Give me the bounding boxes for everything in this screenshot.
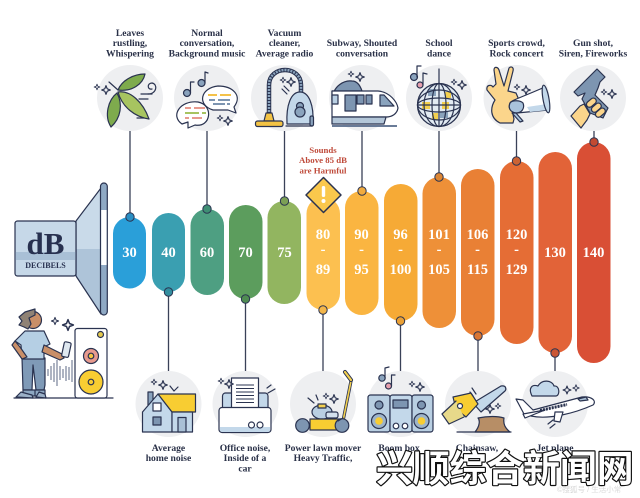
bottom label: lawn mower (285, 443, 362, 464)
bottom label: chainsaw: Chainsaw, (456, 443, 499, 454)
top label: subway: conversation (336, 48, 389, 60)
bottom label: boom box: Boom box (378, 443, 420, 454)
callout: sounds above 85 dB are harmful: Sounds (309, 145, 337, 155)
bottom label: office noise (220, 443, 271, 474)
bar: 75 dB: 75 (277, 245, 292, 261)
bar: 120-129 dB (500, 161, 534, 344)
top label: leaves (106, 28, 154, 60)
icon: subway train (329, 65, 398, 131)
bar: 30 dB (113, 217, 146, 288)
top label: conversation: Normal (191, 28, 223, 39)
bar: 130 dB (538, 152, 572, 353)
connector lines and nodes (126, 131, 598, 372)
icon: boom box (368, 367, 434, 437)
bar: 75 dB (268, 201, 301, 304)
top label: school dance: dance (427, 48, 452, 60)
bar: 101-105 dB: 105 (428, 262, 450, 278)
top label: sports crowd: Rock concert (489, 48, 544, 60)
icon: gun in hand (560, 65, 626, 131)
bottom label: lawn mower: Heavy Traffic, (294, 453, 353, 464)
bar: 96-100 dB (384, 184, 418, 321)
bottom label: home noise: home noise (146, 453, 192, 464)
bar: 80-89 dB: - (321, 242, 326, 258)
bar: 90-95 dB: - (359, 242, 364, 258)
bar: 30 dB: 30 (122, 245, 137, 261)
bar: 106-115 dB: 115 (467, 262, 488, 278)
icon: jet plane and cloud (516, 371, 594, 437)
bar: 101-105 dB: - (437, 242, 442, 258)
callout: sounds above 85 dB are harmful (299, 145, 347, 212)
bar: 130 dB: 130 (544, 245, 566, 261)
top label: leaves: Leaves (116, 28, 144, 39)
heading: dB: dB (27, 226, 64, 261)
icon: leaves (94, 65, 163, 131)
bar: 120-129 dB: 120 (506, 227, 527, 243)
top label: leaves: rustling, (113, 38, 148, 49)
top label: vacuum: Average radio (256, 48, 314, 60)
top label: gun shot: Siren, Fireworks (559, 48, 627, 60)
icon: peace hand with megaphone (484, 65, 551, 131)
callout: sounds above 85 dB are harmful: Above 85 dB (299, 155, 347, 165)
icon: vacuum cleaner (251, 65, 317, 131)
bar: 96-100 dB: - (398, 242, 403, 258)
top label: school dance: School (425, 38, 453, 49)
illustration: person with phone and loudspeaker (12, 309, 113, 398)
top label: vacuum: cleaner, (269, 38, 301, 49)
icon: printer (212, 371, 278, 437)
watermark: site name: 兴顺综合新闻网 (376, 448, 634, 490)
icon: conversation speech bubbles (174, 65, 240, 131)
callout: sounds above 85 dB are harmful: are Harmful (300, 166, 347, 176)
top label: gun shot: Gun shot, (573, 38, 614, 49)
bottom label: office noise: Inside of a (224, 453, 267, 464)
label: decibels: DECIBELS (25, 261, 66, 270)
bar: 60 dB: 60 (200, 245, 214, 261)
bar: 60 dB (190, 209, 224, 295)
bar: 70 dB (229, 205, 262, 299)
top label: subway: Subway, Shouted (327, 38, 398, 49)
top label: conversation: conversation, (180, 38, 235, 49)
bar: 40 dB: 40 (161, 245, 176, 261)
top label: subway (327, 38, 398, 60)
bottom label: office noise: car (238, 464, 252, 474)
bar: 106-115 dB (461, 169, 494, 336)
bottom label: home noise: Average (152, 443, 186, 454)
bar: 120-129 dB: - (514, 242, 519, 258)
bottom label: home noise (146, 443, 192, 464)
top label: conversation (169, 28, 246, 60)
top label: leaves: Whispering (106, 48, 154, 60)
icon: lawn mower (290, 371, 356, 437)
top label: vacuum (256, 28, 314, 60)
bar: 96-100 dB: 100 (390, 262, 411, 278)
bar: 101-105 dB (422, 177, 456, 328)
bottom label: office noise: Office noise, (220, 443, 271, 454)
watermark: small source credit: ©搜狐号 / 生活小常 (557, 484, 621, 494)
bottom label: lawn mower: Power lawn mover (285, 443, 362, 454)
bar: 120-129 dB: 129 (506, 262, 527, 278)
icon: disco ball (406, 65, 472, 131)
icon: chainsaw and tree stump (442, 371, 511, 437)
bottom label: jet plane: Jet plane (536, 443, 574, 454)
bar: 106-115 dB: 106 (467, 227, 488, 243)
top label: conversation: Background music (169, 48, 246, 60)
top label: gun shot (559, 38, 627, 60)
bar: 80-89 dB (306, 197, 340, 310)
top label: school dance (425, 38, 453, 60)
speaker: dB decibels (15, 183, 107, 315)
bar: 40 dB (152, 213, 185, 292)
icon: house (136, 371, 202, 437)
chart: decibel level bars (113, 142, 610, 363)
top label: sports crowd (488, 38, 546, 60)
bar: 106-115 dB: - (475, 242, 480, 258)
bar: 80-89 dB: 80 (316, 227, 330, 243)
bar: 80-89 dB: 89 (316, 262, 330, 278)
bar: 90-95 dB: 90 (354, 227, 369, 243)
bar: 140 dB (577, 142, 610, 363)
bar: 96-100 dB: 96 (393, 227, 408, 243)
bar: 140 dB: 140 (583, 245, 604, 261)
top label: sports crowd: Sports crowd, (488, 38, 546, 49)
bar: 70 dB: 70 (238, 245, 253, 261)
bar: 90-95 dB: 95 (354, 262, 369, 278)
bar: 101-105 dB: 101 (428, 227, 450, 243)
bar: 90-95 dB (345, 191, 378, 315)
top label: vacuum: Vacuum (268, 28, 301, 39)
